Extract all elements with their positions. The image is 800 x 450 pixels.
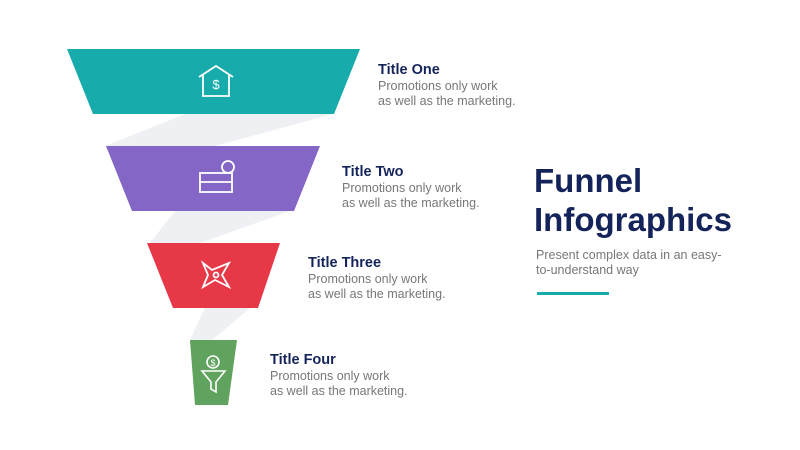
text: title four: as well as the marketing. bbox=[270, 384, 408, 398]
text: title one: Promotions only work bbox=[378, 79, 498, 93]
icon: briefcase clock bbox=[200, 161, 234, 192]
text: title two: as well as the marketing. bbox=[342, 196, 480, 210]
text: title two: Title Two bbox=[342, 164, 404, 180]
icon: house dollar: $ bbox=[212, 77, 220, 92]
text: title three: as well as the marketing. bbox=[308, 287, 446, 301]
shadow strips bbox=[105, 114, 333, 340]
text: title one: Title One bbox=[378, 62, 440, 78]
icon: funnel coin: $ bbox=[210, 358, 216, 368]
text: title three bbox=[308, 255, 446, 301]
text: title three: Promotions only work bbox=[308, 272, 428, 286]
text: title three: Title Three bbox=[308, 255, 381, 271]
accent line bbox=[537, 292, 609, 295]
icon: house dollar bbox=[199, 66, 233, 96]
band 3 red bbox=[147, 243, 280, 308]
text: title four bbox=[270, 352, 408, 398]
subtitle bbox=[536, 248, 722, 277]
text: title one: as well as the marketing. bbox=[378, 94, 516, 108]
text: title four: Title Four bbox=[270, 352, 336, 368]
main heading bbox=[534, 162, 732, 238]
icon: shuriken bbox=[203, 263, 229, 287]
band 4 green bbox=[190, 340, 237, 405]
text: title four: Promotions only work bbox=[270, 369, 390, 383]
band 1 teal bbox=[67, 49, 360, 114]
subtitle: to-understand way bbox=[536, 263, 639, 277]
main heading: Infographics bbox=[534, 201, 732, 238]
text: title one bbox=[378, 62, 516, 108]
band 2 purple bbox=[106, 146, 320, 211]
text: title two: Promotions only work bbox=[342, 181, 462, 195]
subtitle: Present complex data in an easy- bbox=[536, 248, 722, 262]
main heading: Funnel bbox=[534, 162, 642, 199]
text: title two bbox=[342, 164, 480, 210]
